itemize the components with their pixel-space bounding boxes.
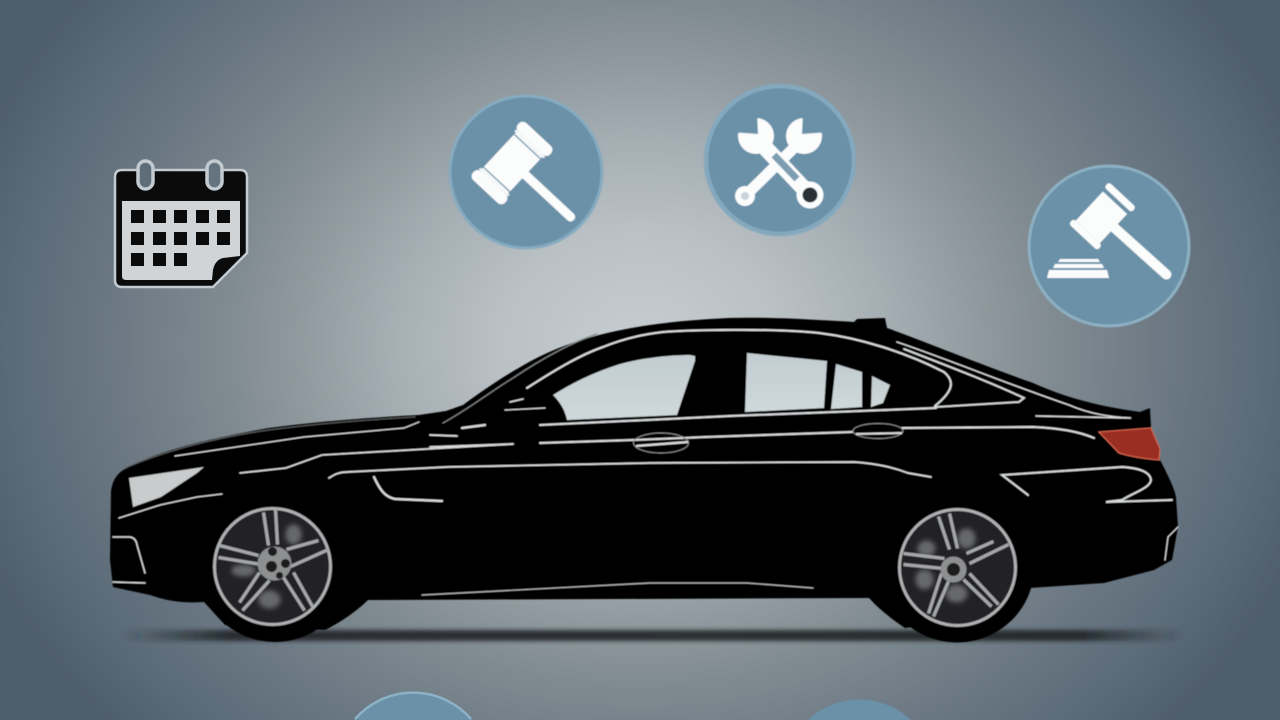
icon: gavel in circle [450, 96, 602, 249]
car windows [553, 353, 890, 420]
icon: calendar [115, 161, 247, 287]
car mirror [500, 390, 564, 428]
ground shadow [122, 630, 1184, 641]
car body silhouette [110, 318, 1178, 630]
door handle rear [853, 424, 903, 438]
car headlight [129, 467, 204, 507]
front wheel [214, 508, 330, 624]
door handle front [634, 433, 688, 453]
icon: partial circle bottom left [354, 693, 472, 720]
rear tyre [880, 492, 1034, 642]
icon: crossed wrenches in circle [706, 86, 854, 234]
icon: partial circle bottom right [808, 700, 911, 720]
front tyre [198, 491, 352, 642]
rear wheel [900, 510, 1016, 626]
icon: gavel and block in circle [1029, 166, 1189, 326]
car [110, 318, 1178, 642]
car chrome highlights [113, 330, 1178, 595]
car tail light [1099, 428, 1160, 460]
